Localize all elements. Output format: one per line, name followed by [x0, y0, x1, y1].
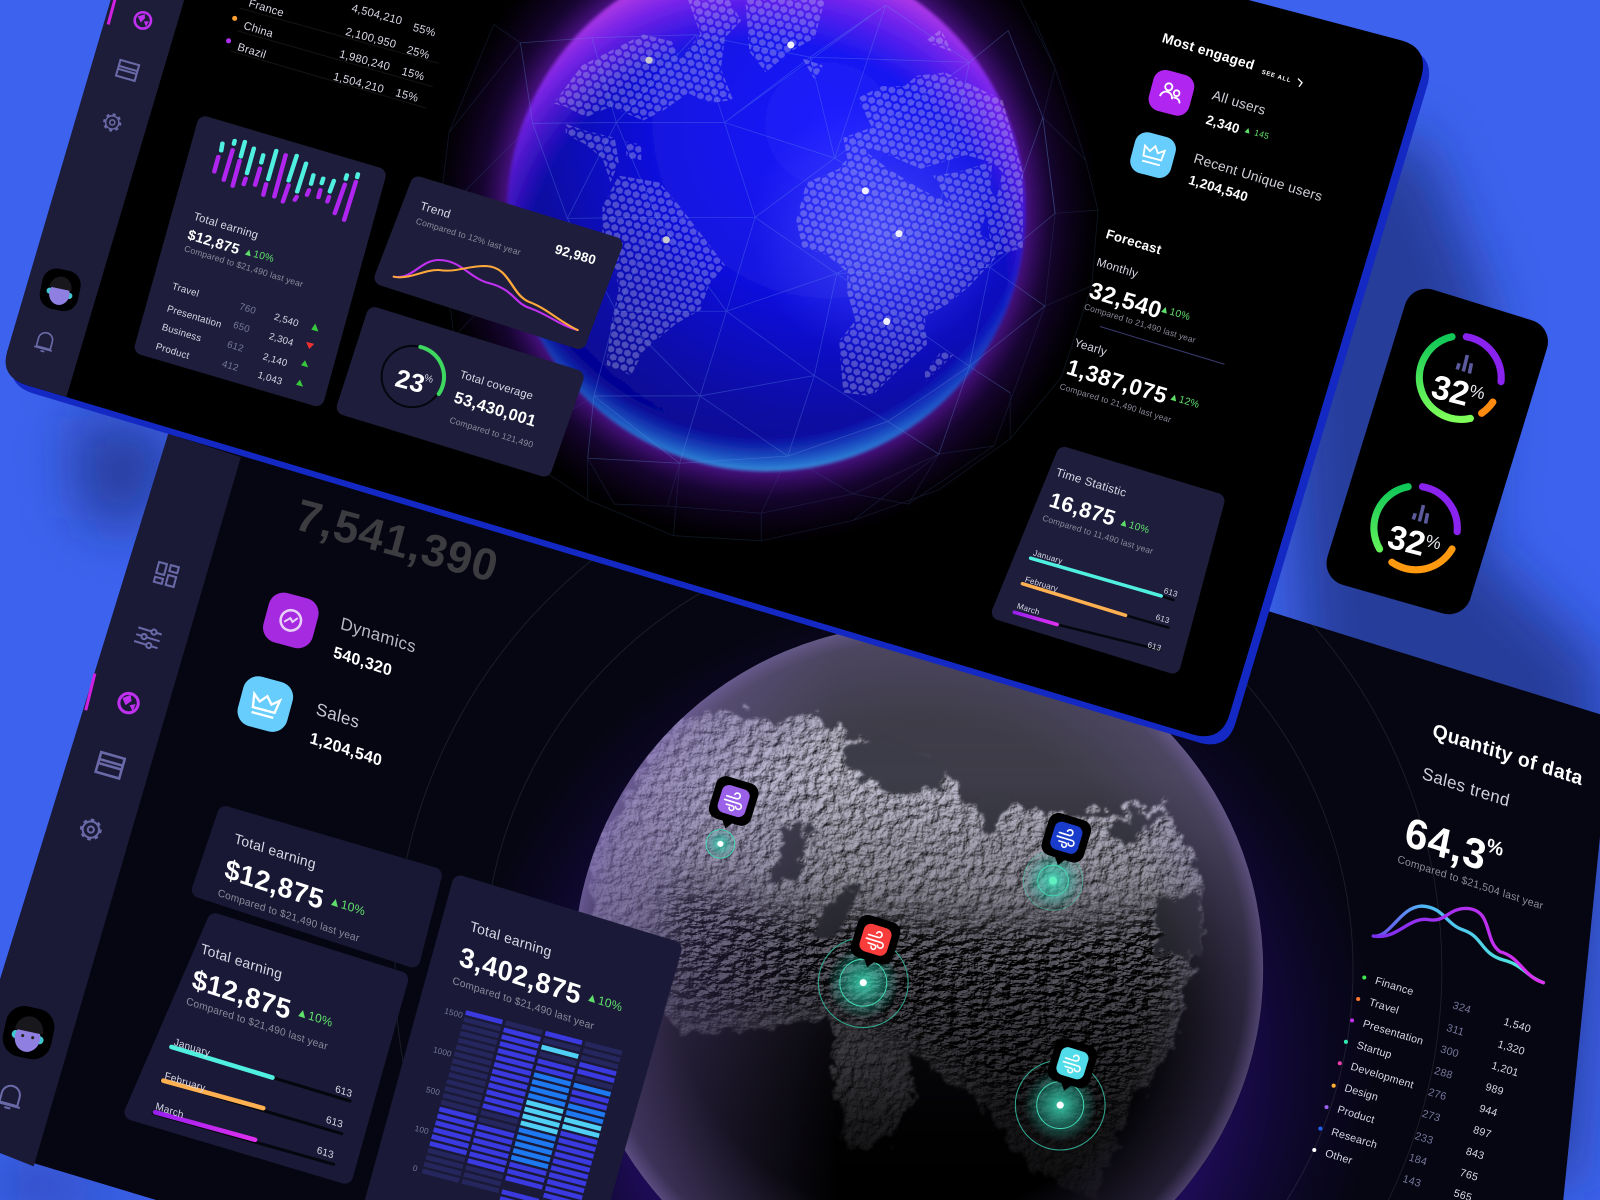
card: heatmap: 3,402,875 — [457, 941, 584, 1011]
card: time statistic: March — [1016, 601, 1041, 617]
panel: phone card with rings: % — [1467, 380, 1488, 404]
ring chart 1 — [1419, 337, 1501, 419]
category list: Finance — [1374, 975, 1415, 998]
category list: 288 — [1433, 1065, 1454, 1082]
chart: bars — [214, 141, 358, 220]
card: time statistic: February — [1024, 575, 1060, 594]
ring chart 2 — [1374, 487, 1457, 570]
panel: forecast — [1059, 226, 1224, 425]
category list: 300 — [1439, 1043, 1460, 1060]
hex continents — [554, 0, 1023, 396]
card: total earning: Travel — [171, 281, 200, 300]
category list: 1,540 — [1502, 1016, 1532, 1036]
panel: forecast: Compared to 21,490 last year — [1083, 302, 1197, 345]
category list: 233 — [1413, 1130, 1435, 1147]
panel: forecast: Yearly — [1073, 336, 1108, 359]
card: total earning: Product — [154, 341, 191, 362]
icon: bell — [0, 1083, 25, 1111]
metric: dynamics — [332, 613, 418, 680]
category list: 944 — [1478, 1103, 1499, 1120]
panel: quantity of data: % — [1485, 834, 1506, 861]
card: total earning 2: Total earning — [199, 941, 284, 983]
card: coverage: 53,430,001 — [452, 389, 538, 431]
card: coverage: 23 — [392, 364, 428, 399]
category list: Research — [1330, 1126, 1379, 1151]
category list: Other — [1324, 1148, 1354, 1167]
category list: 143 — [1401, 1173, 1422, 1190]
icon: all users — [1146, 67, 1197, 118]
heatmap chart — [434, 1015, 604, 1200]
card: total earning 2: 613 — [334, 1084, 353, 1100]
metric: recent unique users: 1,204,540 — [1187, 172, 1250, 204]
card: time statistic: 613 — [1155, 613, 1171, 626]
metric: dynamics: Dynamics — [339, 613, 418, 657]
panel: phone card with rings — [1349, 311, 1526, 592]
pin: blue — [1022, 810, 1094, 911]
nav indicator — [86, 673, 95, 710]
card: time statistic: ▲10% — [1117, 517, 1151, 537]
card: time statistic: Time Statistic — [1054, 466, 1128, 500]
orbit rings — [394, 560, 1442, 1200]
country list: 15% — [394, 87, 420, 105]
heading: most engaged — [1160, 30, 1302, 87]
axis labels: 100 — [414, 1124, 430, 1136]
metric: all users: ▲ 145 — [1242, 124, 1270, 141]
pin: teal — [1015, 1036, 1105, 1150]
avatar — [0, 1003, 58, 1063]
card: coverage: % — [423, 373, 434, 386]
card: coverage — [345, 315, 576, 468]
category list: 1,320 — [1496, 1038, 1526, 1058]
card: total earning: Compared to $21,490 last year — [183, 243, 304, 289]
metric: recent unique users: Recent Unique users — [1192, 151, 1324, 204]
metric: sales — [308, 699, 384, 770]
card: time statistic: 16,875 — [1046, 488, 1119, 531]
trend arrows — [296, 323, 318, 387]
chart: blue globe — [500, 0, 1055, 480]
nav indicator — [108, 0, 115, 24]
card: total earning 2: Compared to $21,490 last year — [185, 996, 329, 1053]
country list: 1,980,240 — [338, 48, 391, 73]
card: total earning 2: 613 — [316, 1145, 335, 1161]
icon: dashboard grid — [154, 562, 179, 587]
panel: lower dashboard — [0, 434, 1600, 1200]
heading: most engaged: SEE ALL — [1261, 69, 1292, 84]
location dots — [645, 41, 903, 325]
avatar — [40, 268, 81, 312]
axis labels: 500 — [425, 1085, 441, 1097]
headline number: 7,541,390 — [290, 489, 504, 592]
axis labels: 1000 — [432, 1045, 453, 1059]
icon: sales — [234, 673, 297, 735]
card: heatmap: ▲10% — [585, 989, 624, 1015]
sidebar: top — [0, 0, 186, 404]
card: heatmap — [369, 884, 673, 1200]
card: total earning 2: March — [155, 1101, 185, 1121]
panel: forecast: 1,387,075 — [1064, 354, 1170, 409]
icon: dynamics — [260, 589, 322, 652]
country list: 55% — [411, 22, 437, 39]
card: total earning: Business — [160, 322, 203, 344]
card: total earning 2: January — [173, 1037, 212, 1060]
category list: 897 — [1472, 1124, 1493, 1141]
sidebar: lower — [0, 434, 241, 1166]
panel: quantity of data: Quantity of data — [1431, 720, 1585, 791]
pin: purple — [704, 774, 761, 859]
halo — [435, 0, 1098, 544]
metric: all users: All users — [1210, 88, 1268, 118]
card: total earning 1: Total earning — [233, 831, 317, 873]
metric: all users — [1204, 88, 1270, 141]
card: trend: Compared to 12% last year — [415, 216, 522, 257]
panel: forecast: ▲12% — [1167, 391, 1201, 411]
country list: 15% — [400, 66, 426, 83]
card: total earning 2: February — [164, 1071, 207, 1095]
category list — [1312, 975, 1532, 1200]
metric: all users: 2,340 — [1204, 112, 1242, 136]
icon: card — [96, 752, 125, 778]
metric: sales: 1,204,540 — [308, 729, 384, 770]
icon: settings — [104, 114, 120, 131]
icon: card — [116, 60, 139, 81]
panel: quantity of data — [1312, 720, 1585, 1200]
country list: 25% — [405, 44, 431, 62]
category list: 989 — [1484, 1081, 1505, 1098]
card: total earning 1 — [200, 814, 434, 959]
metric: sales: Sales — [315, 699, 361, 732]
category list: 276 — [1427, 1086, 1448, 1103]
category list: 843 — [1464, 1145, 1486, 1162]
panel: forecast: 32,540 — [1086, 277, 1165, 324]
category list: Design — [1343, 1082, 1380, 1104]
card: total earning: 2,540 — [273, 312, 300, 330]
card: coverage: Total coverage — [458, 369, 535, 403]
icon: sliders — [133, 625, 163, 651]
card: total earning 2 — [133, 921, 400, 1176]
category list: Development — [1349, 1061, 1415, 1091]
ring: coverage — [382, 346, 444, 407]
country list — [226, 0, 439, 108]
card: trend — [383, 185, 614, 341]
country list: Brazil — [236, 41, 267, 61]
category list: Travel — [1367, 996, 1400, 1017]
card: total earning: 2,140 — [261, 352, 289, 370]
card: heatmap: Total earning — [469, 919, 553, 961]
country list: 2,100,950 — [344, 26, 397, 51]
axis labels: 0 — [412, 1164, 419, 1174]
bar list — [153, 1047, 350, 1164]
card: heatmap: Compared to $21,490 last year — [451, 976, 595, 1033]
card: total earning: 2,304 — [267, 331, 295, 349]
panel: phone card with rings: 32 — [1428, 369, 1473, 414]
card: total earning: 612 — [226, 339, 245, 355]
icon: bell — [34, 332, 54, 352]
panel: phone card with rings: 32 — [1384, 519, 1429, 564]
card: total earning: Total earning — [192, 211, 260, 242]
category list: 324 — [1451, 1000, 1472, 1016]
panel: quantity of data: Compared to $21,504 last year — [1396, 853, 1544, 913]
panel: forecast: Forecast — [1104, 226, 1164, 257]
network mesh front — [520, 5, 1055, 463]
country list: China — [242, 20, 275, 40]
card: total earning 1: $12,875 — [222, 853, 327, 915]
card: total earning 1: Compared to $21,490 last year — [217, 888, 361, 945]
country list: 4,504,210 — [350, 3, 404, 28]
card: coverage: Compared to 121,490 — [448, 415, 535, 450]
panel: quantity of data: Sales trend — [1421, 763, 1512, 811]
axis labels: 1500 — [443, 1007, 464, 1020]
card: total earning — [143, 124, 378, 398]
card: time statistic: 613 — [1163, 586, 1179, 599]
panel: forecast: Monthly — [1095, 256, 1140, 281]
metric: dynamics: 540,320 — [332, 643, 394, 680]
category list: Product — [1336, 1104, 1376, 1126]
icon: globe active — [119, 693, 138, 713]
chart: earth globe — [578, 634, 1264, 1200]
line chart: trend — [394, 260, 578, 330]
country list: 1,504,210 — [332, 71, 385, 96]
card: total earning: ▲10% — [242, 246, 275, 265]
category list: Startup — [1355, 1039, 1393, 1061]
card: total earning: 1,043 — [256, 370, 284, 388]
category list: 273 — [1421, 1108, 1442, 1125]
card: total earning: 650 — [232, 320, 251, 335]
line chart: sales trend — [1373, 906, 1543, 983]
card: total earning 1: ▲10% — [328, 893, 366, 919]
card: time statistic: Compared to 11,490 last year — [1041, 513, 1155, 556]
card: total earning: 412 — [221, 359, 240, 374]
category list: 311 — [1445, 1022, 1465, 1039]
card: total earning 2: 613 — [325, 1115, 344, 1131]
card: total earning: 760 — [238, 302, 258, 317]
card: total earning 2: $12,875 — [190, 963, 294, 1026]
panel: forecast: ▲10% — [1158, 304, 1191, 323]
card: time statistic: January — [1032, 548, 1064, 566]
card: trend: Trend — [419, 200, 452, 221]
icon: globe active — [135, 12, 151, 29]
pin: red — [818, 912, 908, 1028]
chart: network mesh back — [439, 0, 1098, 541]
card: total earning: $12,875 — [186, 227, 241, 258]
category list: 1,201 — [1490, 1060, 1520, 1079]
panel: forecast: Compared to 21,490 last year — [1059, 381, 1173, 425]
axis labels — [412, 1007, 464, 1174]
panel: quantity of data: 64,3 — [1401, 808, 1491, 880]
panel: top dashboard — [0, 0, 1423, 736]
inland seas — [757, 731, 1198, 953]
category list: Presentation — [1361, 1018, 1425, 1048]
card: total earning: Presentation — [165, 304, 223, 331]
icon: recent users — [1127, 129, 1179, 181]
category list: 184 — [1407, 1152, 1429, 1168]
icon: settings — [81, 820, 101, 839]
card: total earning 2: ▲10% — [295, 1005, 334, 1030]
card: time statistic: 613 — [1146, 640, 1163, 653]
card: time statistic — [1000, 455, 1216, 665]
heading: most engaged: Most engaged — [1160, 30, 1256, 73]
panel: top dashboard edge — [12, 3, 1429, 744]
card: trend: 92,980 — [553, 242, 598, 268]
panel: phone card with rings: % — [1424, 530, 1444, 554]
category list: 765 — [1458, 1167, 1480, 1184]
